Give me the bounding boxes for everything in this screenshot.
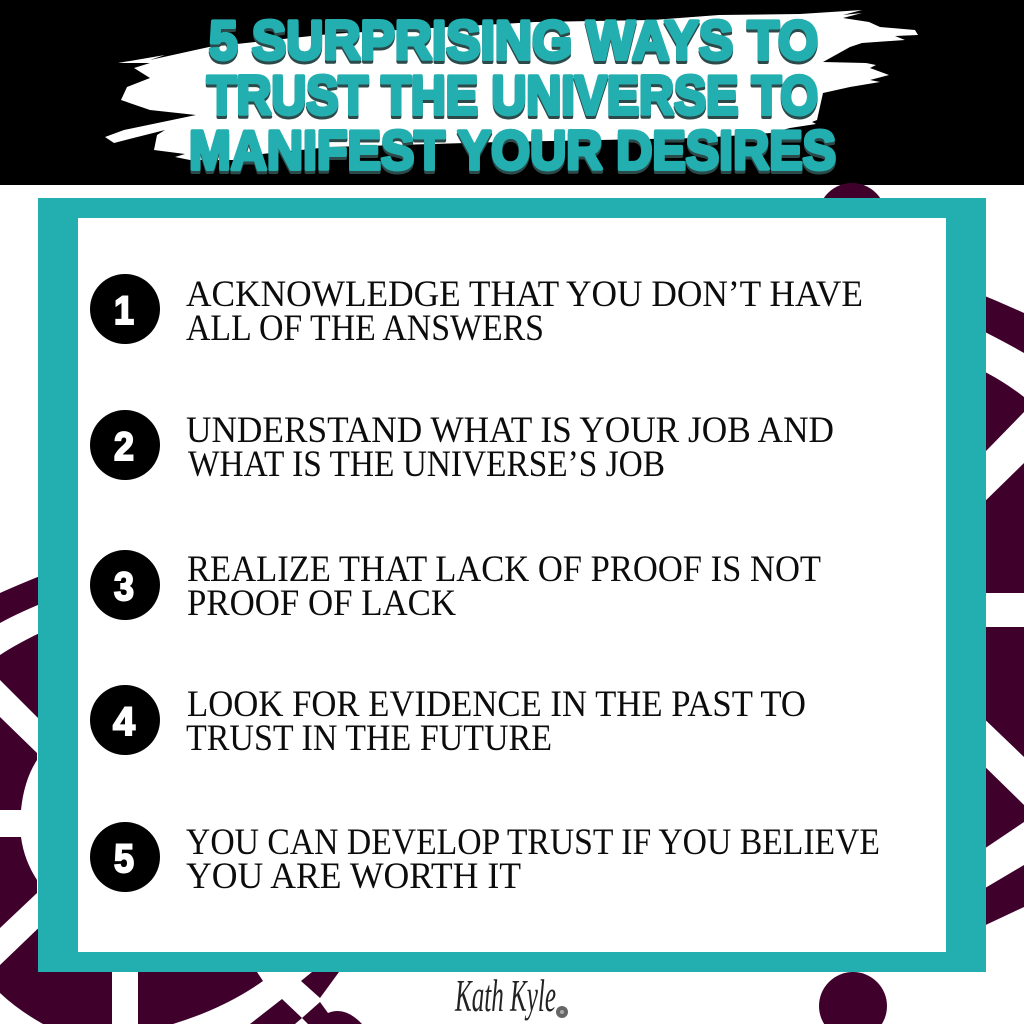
item 1 text: ACKNOWLEDGE THAT YOU DON’T HAVE <box>186 274 863 315</box>
number badge 4: 4 <box>113 700 136 744</box>
white brush stroke behind title <box>105 10 918 160</box>
title: 5 SURPRISING WAYS TO <box>209 9 818 71</box>
header black band <box>0 0 1024 185</box>
list item 2 <box>90 410 834 485</box>
list item 4 <box>90 684 806 759</box>
number badge 4 <box>90 685 160 755</box>
signature: Kath Kyle <box>454 971 556 1021</box>
number badge 2: 2 <box>114 425 134 469</box>
signature <box>454 971 568 1021</box>
list item 3 <box>90 549 821 624</box>
item 3 text <box>187 549 821 624</box>
item 3 text: REALIZE THAT LACK OF PROOF IS NOT <box>187 549 821 590</box>
item 5 text: YOU CAN DEVELOP TRUST IF YOU BELIEVE <box>186 822 880 863</box>
item 5 text <box>186 822 880 897</box>
list item 5 <box>90 822 880 897</box>
number badge 5 <box>90 822 160 892</box>
number badge 2 <box>90 410 160 480</box>
title <box>189 9 836 181</box>
item 3 text: PROOF OF LACK <box>187 583 456 624</box>
item 4 text: TRUST IN THE FUTURE <box>186 718 552 759</box>
number badge 5: 5 <box>114 837 134 881</box>
panel: teal framed list <box>38 198 986 972</box>
item 2 text: UNDERSTAND WHAT IS YOUR JOB AND <box>186 410 834 451</box>
item 1 text: ALL OF THE ANSWERS <box>186 308 544 349</box>
icon: small mandala mark <box>556 1006 568 1018</box>
title: TRUST THE UNIVERSE TO <box>207 64 818 126</box>
item 2 text <box>186 410 834 485</box>
number badge 1 <box>90 274 160 344</box>
item 5 text: YOU ARE WORTH IT <box>186 856 521 897</box>
panel: white list background <box>78 218 946 952</box>
item 1 text <box>186 274 863 349</box>
number badge 1: 1 <box>114 289 134 333</box>
number badge 3: 3 <box>114 565 134 609</box>
list item 1 <box>90 274 863 349</box>
number badge 3 <box>90 550 160 620</box>
item 4 text: LOOK FOR EVIDENCE IN THE PAST TO <box>187 684 806 725</box>
item 4 text <box>186 684 806 759</box>
title: MANIFEST YOUR DESIRES <box>189 119 836 181</box>
item 2 text: WHAT IS THE UNIVERSE’S JOB <box>188 444 665 485</box>
